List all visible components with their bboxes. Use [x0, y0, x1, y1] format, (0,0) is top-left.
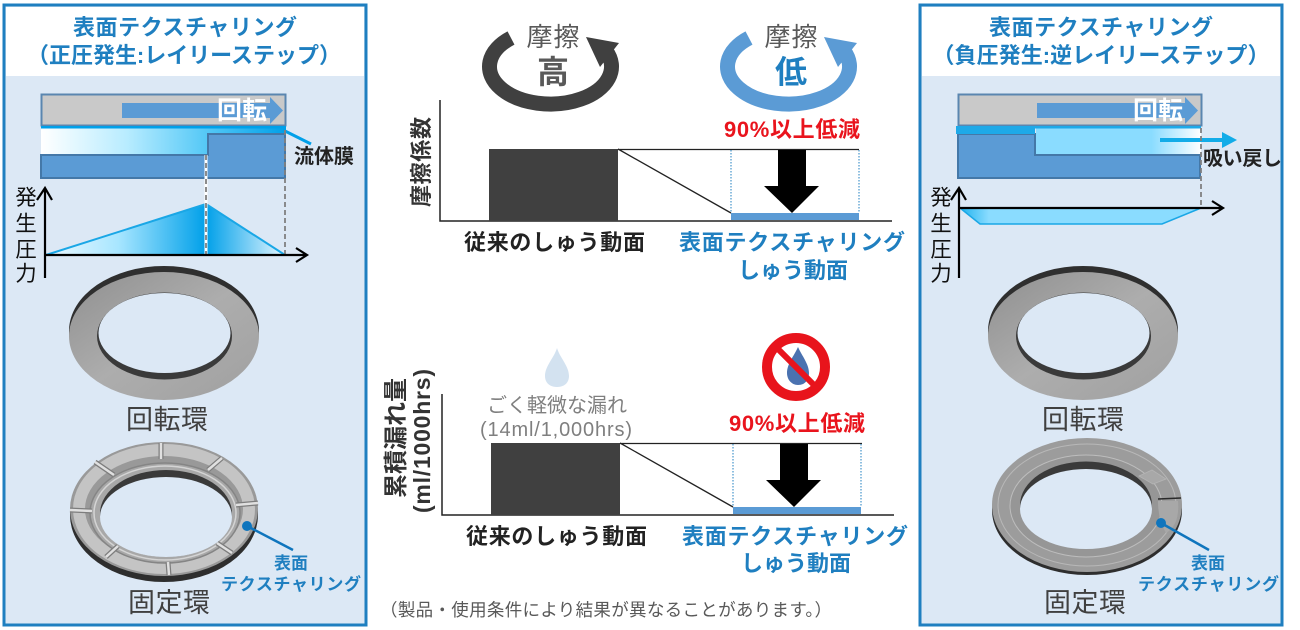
bar chart: cumulative leakage: 90%以上低減 [729, 411, 865, 436]
panel: leakage comparison [380, 338, 908, 620]
heading: positive pressure [27, 15, 341, 68]
bar chart: friction coefficient: 従来のしゅう動面 [464, 230, 645, 255]
label: rotating ring: 回転環 [1042, 405, 1124, 435]
label: rotating ring: 回転環 [126, 405, 208, 435]
bar chart: friction coefficient: 摩擦係数 [409, 117, 434, 207]
label: stationary ring: 固定環 [128, 588, 210, 618]
footnote: （製品・使用条件により結果が異なることがあります。） [380, 600, 832, 620]
bar chart: cumulative leakage: 累積漏れ量 [383, 378, 410, 498]
panel: negative pressure texturing [920, 5, 1282, 625]
icon: water drop [545, 348, 569, 387]
diagram: rayleigh step cross-section: 流体膜 [294, 145, 354, 168]
bar chart: cumulative leakage: 従来のしゅう動面 [466, 524, 647, 549]
diagram: rayleigh step cross-section [41, 94, 354, 178]
bar chart: friction coefficient [409, 100, 905, 283]
callout: surface texturing: 表面 [274, 554, 308, 573]
callout: surface texturing: 表面 [1191, 554, 1225, 573]
panel: positive pressure texturing [4, 5, 366, 625]
callout: surface texturing: テクスチャリング [221, 574, 361, 594]
bar chart: cumulative leakage: (14ml/1,000hrs) [480, 419, 632, 441]
heading: negative pressure: 表面テクスチャリング [989, 15, 1213, 40]
callout: surface texturing [221, 521, 361, 594]
bar chart: cumulative leakage [383, 369, 908, 576]
diagram: reverse rayleigh step cross-section [956, 94, 1282, 178]
callout: surface texturing: テクスチャリング [1138, 574, 1279, 594]
heading: negative pressure [932, 15, 1270, 68]
chart: generated negative pressure [930, 128, 1223, 286]
chart: generated negative pressure: 発 [930, 186, 952, 210]
callout: surface texturing [1138, 518, 1279, 594]
icon: low friction arrow: 摩擦 [764, 22, 818, 52]
chart: generated negative pressure: 力 [930, 262, 952, 286]
bar chart: cumulative leakage: (ml/1000hrs) [409, 369, 435, 513]
icon: high friction arrow: 高 [537, 54, 569, 90]
icon: low friction arrow [728, 22, 857, 104]
label: stationary ring: 固定環 [1044, 588, 1126, 618]
chart: generated pressure [15, 130, 307, 286]
panel: friction comparison [409, 22, 905, 283]
icon: low friction arrow: 低 [775, 54, 807, 90]
diagram: rayleigh step cross-section: 回転 [217, 97, 267, 125]
chart: generated pressure: 力 [15, 262, 37, 286]
icon: high friction arrow [490, 22, 619, 104]
icon: stationary ring with pads [70, 442, 258, 582]
icon: rotating ring [988, 266, 1178, 400]
icon: rotating ring [69, 266, 259, 400]
chart: generated negative pressure: 圧 [930, 238, 952, 262]
chart: generated pressure: 発 [15, 186, 37, 210]
diagram: reverse rayleigh step cross-section: 吸い戻し [1203, 147, 1282, 170]
chart: generated pressure: 圧 [15, 238, 37, 262]
bar chart: friction coefficient: 90%以上低減 [724, 117, 860, 142]
heading: positive pressure: （正圧発生:レイリーステップ） [27, 43, 341, 68]
chart: generated negative pressure: 生 [930, 212, 952, 236]
bar chart: friction coefficient: しゅう動面 [738, 258, 848, 283]
bar chart: cumulative leakage: ごく軽微な漏れ [487, 394, 627, 417]
icon: high friction arrow: 摩擦 [526, 22, 580, 52]
chart: generated pressure: 生 [15, 212, 37, 236]
icon: no leakage sign [767, 338, 825, 396]
bar chart: friction coefficient: 表面テクスチャリング [679, 230, 905, 255]
icon: stationary ring with reverse step [992, 438, 1182, 575]
heading: negative pressure: （負圧発生:逆レイリーステップ） [932, 43, 1270, 68]
diagram: reverse rayleigh step cross-section: 回転 [1133, 97, 1183, 125]
bar chart: cumulative leakage: 表面テクスチャリング [682, 524, 908, 549]
heading: positive pressure: 表面テクスチャリング [73, 15, 297, 40]
bar chart: cumulative leakage: しゅう動面 [741, 551, 851, 576]
